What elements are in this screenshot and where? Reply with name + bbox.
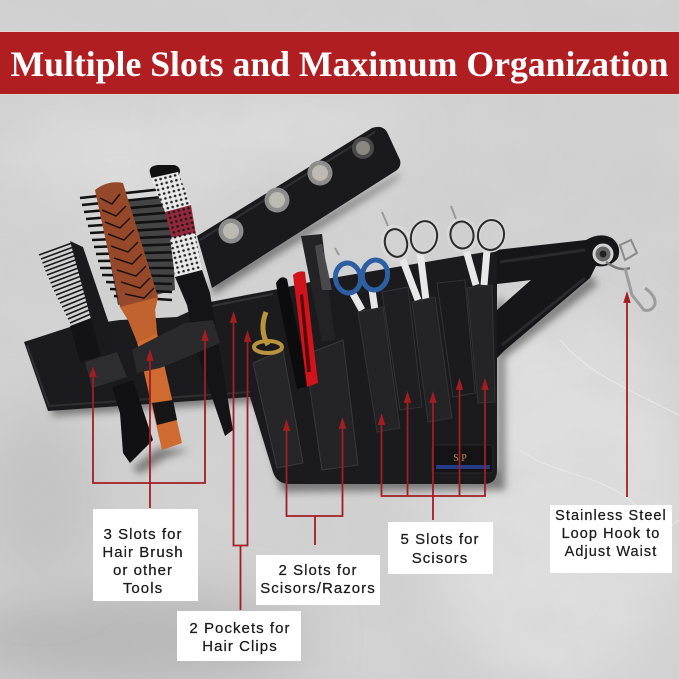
icon: grommet 1: [218, 218, 244, 244]
connector: 5 slots for scissors: [379, 381, 488, 520]
tool: blue scissors: [333, 248, 390, 310]
label: 3 slots for hair brush: or other: [113, 562, 173, 579]
title banner: [0, 31, 679, 95]
label: 3 slots for hair brush: Tools: [123, 580, 163, 597]
tool: black comb: [301, 234, 335, 342]
logo patch: S P: [453, 453, 467, 464]
tool: silver scissors 2: [447, 206, 506, 285]
icon: grommet 4: [352, 137, 374, 159]
label: stainless steel hook: Adjust Waist: [565, 544, 657, 560]
label: 3 slots for hair brush: Hair Brush: [102, 544, 184, 561]
tool: white and red round brush: [150, 165, 233, 436]
icon: steel loop hook: [594, 240, 655, 310]
tool: hair clip black: [276, 277, 309, 389]
label: 2 pockets for hair clips: 2 Pockets for: [189, 620, 291, 637]
tool belt: perforated strap: [197, 127, 400, 288]
tool: black bristle brush: [80, 188, 186, 305]
connector: 2 pockets for hair clips: [231, 314, 250, 610]
icon: grommet 3: [308, 160, 332, 186]
label: 2 slots for scissors or razors: Scisors/Razors: [260, 580, 376, 597]
connector: steel hook: [624, 294, 630, 497]
label: stainless steel hook: Stainless Steel: [555, 508, 667, 524]
tool: wooden round brush: [95, 182, 182, 450]
slot 5: [467, 285, 495, 403]
scissor slots: [358, 280, 495, 432]
label: 3 slots for hair brush: [93, 509, 198, 601]
label: 2 slots for scissors or razors: [256, 555, 380, 605]
drop shadows of the tool belt: [52, 172, 598, 492]
label: stainless steel hook: [550, 505, 672, 573]
label: 3 slots for hair brush: 3 Slots for: [103, 526, 183, 543]
label: 2 slots for scissors or razors: 2 Slots for: [278, 562, 358, 579]
pocket: slot right: [305, 340, 358, 470]
label: 2 pockets for hair clips: [177, 611, 301, 661]
tool: comb with teeth: [39, 241, 153, 463]
slot 4: [437, 280, 475, 397]
connector: 3 slots for hair brush: [90, 332, 208, 508]
tool belt: waist section and main pouch: [24, 250, 497, 484]
title banner: Multiple Slots and Maximum Organization: [10, 44, 668, 84]
tool: silver scissors: [379, 212, 440, 300]
label: stainless steel hook: Loop Hook to: [562, 526, 660, 542]
logo patch: [432, 445, 493, 473]
connector: 2 slots for scissors or razors: [284, 420, 345, 545]
tool: hair clip red: [293, 271, 318, 387]
label: 5 slots for scissors: 5 Slots for: [400, 531, 480, 548]
icon: grommet 2: [264, 188, 290, 212]
slot 1: [358, 307, 400, 432]
label: 2 pockets for hair clips: Hair Clips: [202, 638, 278, 655]
tool belt: right strap and loop: [496, 235, 619, 358]
pocket: slot left: [253, 350, 303, 468]
label: 5 slots for scissors: Scisors: [412, 550, 468, 567]
holding band for comb: [85, 352, 127, 388]
holding band for brushes: [132, 320, 220, 373]
label: 5 slots for scissors: [388, 522, 493, 574]
tool: gold hook: [254, 312, 282, 353]
slot 3: [412, 297, 452, 422]
slot 2: [382, 287, 422, 410]
